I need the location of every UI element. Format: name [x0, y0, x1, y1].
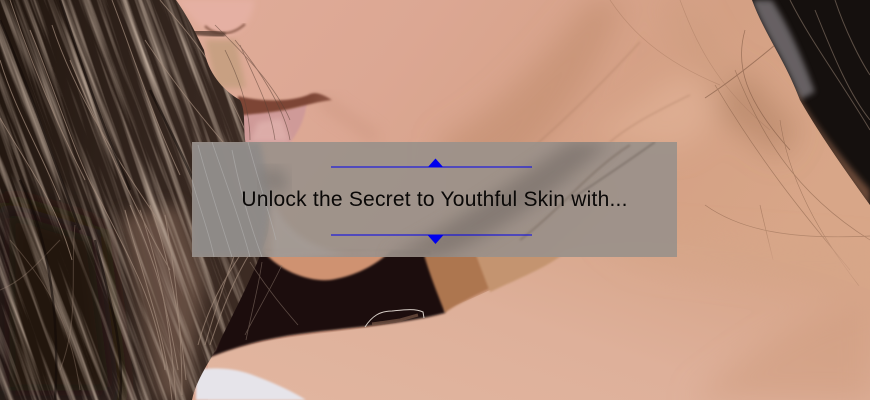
neck patch: [424, 255, 562, 313]
neck creases and stray hairs: [530, 0, 870, 400]
right hair mass: [752, 0, 870, 205]
left hair mass: [0, 0, 260, 400]
white towel: [196, 368, 306, 400]
bottom divider with downward triangle: [331, 234, 532, 244]
chin: [262, 250, 392, 280]
panel texture: reflected hair and neck shadows: [192, 142, 655, 262]
lips: [232, 93, 378, 143]
hair strands: [0, 0, 262, 400]
translucent title panel: [192, 142, 677, 262]
title text: Unlock the Secret to Youthful Skin with...: [241, 188, 628, 211]
dark space under chin: [208, 250, 446, 358]
hair lighter flow: [120, 205, 205, 400]
lower shoulder: [208, 242, 870, 400]
hair texture: [0, 0, 257, 400]
cheek patch behind hair: [205, 40, 246, 88]
hair lower-left darker: [0, 200, 120, 400]
neck shading: [400, 0, 800, 300]
hair wisps over mouth and dark space: [215, 25, 298, 340]
nose: [176, 0, 254, 36]
stray curl on shoulder: [365, 310, 424, 327]
top divider with upward triangle: [331, 158, 532, 168]
